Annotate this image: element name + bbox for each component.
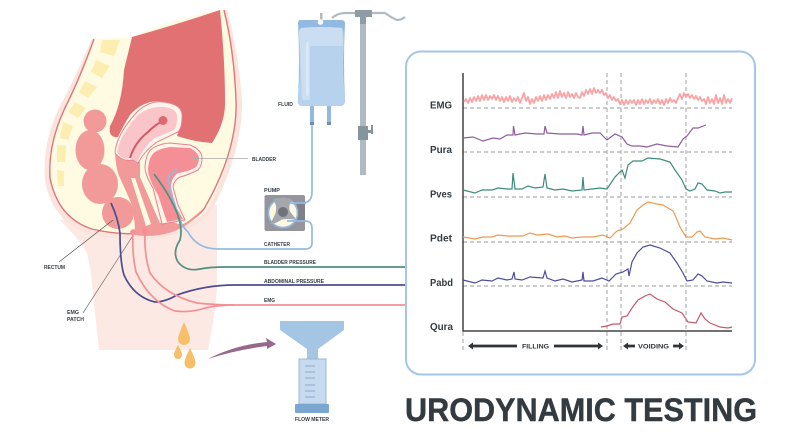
Pabd trace <box>463 245 732 283</box>
labels: anatomy and equipment: CATHETER <box>264 242 290 248</box>
labels: anatomy and equipment: ABDOMINAL PRESSURE <box>264 279 325 285</box>
uterine cavity <box>130 121 163 158</box>
labels: anatomy and equipment: EMG <box>264 298 275 304</box>
rectum <box>76 110 134 229</box>
arrow to flow meter <box>208 338 276 359</box>
trace labels: EMG <box>430 100 452 112</box>
trace labels <box>430 100 453 333</box>
labels: anatomy and equipment: EMG <box>67 310 79 316</box>
EMG trace <box>464 88 732 105</box>
flow meter <box>280 321 344 413</box>
filling arrow: FILLING <box>522 344 549 350</box>
trace labels: Pabd <box>430 278 453 289</box>
vaginal canal <box>131 178 151 226</box>
Pves trace <box>463 158 732 193</box>
urine drops <box>174 322 196 368</box>
outer skin <box>45 10 242 239</box>
axes <box>463 73 732 331</box>
anatomy: pelvis cross-section <box>45 10 242 239</box>
labels: anatomy and equipment: FLUID <box>278 102 293 108</box>
title: URODYNAMIC TESTING <box>405 392 757 428</box>
perineal patches <box>130 229 136 235</box>
trace labels: Qura <box>430 322 453 333</box>
EMG lines <box>133 232 405 312</box>
labels: anatomy and equipment: BLADDER <box>252 157 276 163</box>
peritoneum / bowel mass <box>110 10 225 143</box>
labels: anatomy and equipment <box>44 102 329 423</box>
labels: anatomy and equipment: RECTUM <box>44 265 65 271</box>
bladder <box>145 143 202 224</box>
pump <box>264 195 306 231</box>
trace labels: Pura <box>430 145 452 156</box>
thigh <box>60 205 217 350</box>
labels: anatomy and equipment: PATCH <box>67 317 84 323</box>
uterus <box>115 102 182 163</box>
voiding arrow <box>623 342 684 350</box>
Pdet trace <box>463 202 732 240</box>
trace labels: Pdet <box>430 234 453 244</box>
dashed guides <box>463 73 732 352</box>
Qura trace <box>601 294 732 328</box>
red body wall line <box>50 10 236 234</box>
vagina and pelvic floor <box>115 153 204 236</box>
trace labels: Pves <box>430 190 452 200</box>
labels: anatomy and equipment: FLOW METER <box>295 417 329 423</box>
catheter tube <box>168 124 312 249</box>
cream interior <box>50 10 237 234</box>
Pura trace <box>463 125 706 147</box>
chart panel <box>406 52 755 374</box>
IV pole <box>332 10 405 175</box>
labels: anatomy and equipment: BLADDER PRESSURE <box>264 260 317 266</box>
filling arrow <box>468 342 603 350</box>
IV fluid bag <box>298 13 345 125</box>
labels: anatomy and equipment: PUMP <box>264 188 281 194</box>
spine vertebrae <box>57 40 120 186</box>
bladder pressure line <box>154 174 405 270</box>
voiding arrow: VOIDING <box>638 344 669 350</box>
leader lines <box>59 158 248 313</box>
abdominal pressure line <box>111 203 405 302</box>
pump rotor <box>270 198 297 224</box>
